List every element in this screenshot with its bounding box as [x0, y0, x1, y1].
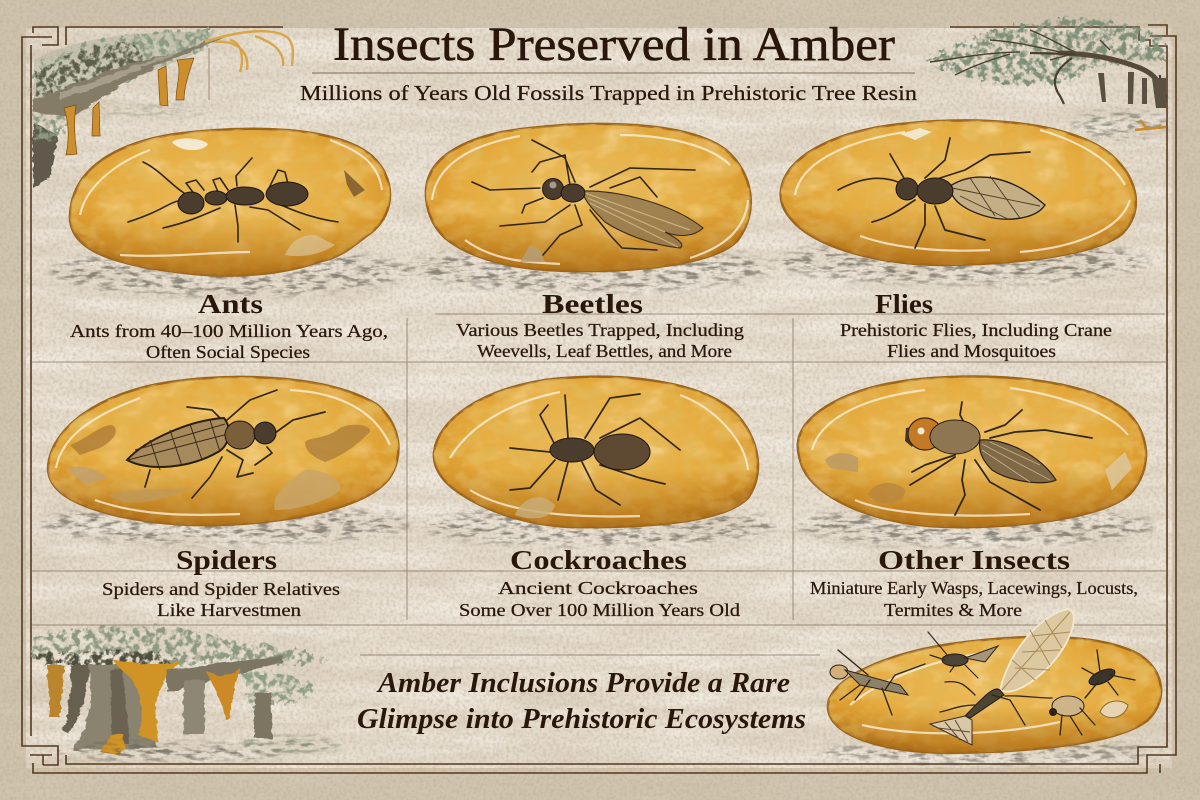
description: beetles: Weevells, Leaf Bettles, and More: [477, 341, 732, 361]
heading: other insects: Other Insects: [878, 545, 1070, 575]
icon: ant: [128, 158, 338, 242]
description: cockroaches: Ancient Cockroaches: [498, 578, 698, 598]
panel: beetles: [408, 124, 772, 361]
icon: cockroach spider: [510, 394, 680, 505]
ground shadow: [772, 240, 1148, 284]
panel: flies: [772, 120, 1148, 361]
icon: lacewing: [930, 609, 1074, 745]
ground shadow: [40, 504, 410, 544]
description: spiders: Like Harvestmen: [157, 600, 301, 620]
amber stone: [798, 377, 1146, 527]
description: cockroaches: Some Over 100 Million Years Old: [459, 600, 740, 620]
icon: winged beetle: [472, 140, 703, 255]
closing statement: Amber Inclusions Provide a Rare: [376, 668, 790, 699]
ground shadow: [820, 740, 1160, 764]
title: Insects Preserved in Amber: [333, 18, 895, 71]
icon: locust: [830, 650, 925, 715]
amber stone: [426, 124, 751, 271]
description: other insects: Miniature Early Wasps, Lacewings, Locusts,: [810, 578, 1138, 598]
amber stone: [828, 637, 1161, 753]
illustration: trees, top right: [925, 18, 1170, 139]
description: beetles: Various Beetles Trapped, Including: [456, 320, 744, 340]
ground shadow: [795, 506, 1155, 546]
subtitle: Millions of Years Old Fossils Trapped in Prehistoric Tree Resin: [300, 81, 918, 105]
description: ants: Often Social Species: [146, 342, 310, 362]
description: flies: Flies and Mosquitoes: [887, 341, 1056, 361]
illustration: fallen resin tree, top left: [33, 30, 293, 188]
ground shadow: [50, 248, 410, 296]
heading: spiders: Spiders: [176, 545, 277, 575]
icon: dark fly: [1082, 650, 1135, 698]
description: spiders: Spiders and Spider Relatives: [102, 579, 340, 599]
icon: small beetle: [1049, 696, 1095, 735]
panel: spiders: [40, 377, 410, 620]
panel: ants: [50, 129, 410, 362]
amber stone: [781, 120, 1136, 265]
description: other insects: Termites & More: [884, 600, 1022, 620]
heading: beetles: Beetles: [542, 289, 643, 319]
illustration: resin-dripping trees, bottom left: [32, 626, 340, 761]
amber stone: [48, 377, 398, 525]
closing statement: Glimpse into Prehistoric Ecosystems: [357, 704, 806, 735]
description: ants: Ants from 40–100 Million Years Ago,: [70, 321, 388, 341]
panel dividers: [32, 314, 1167, 655]
illustration: amber with assorted insects: [820, 609, 1161, 764]
closing statement: [357, 668, 806, 735]
amber stone: [70, 129, 390, 275]
amber stone: [434, 377, 758, 527]
ground shadow: [422, 506, 778, 546]
panel: other insects: [795, 377, 1155, 620]
icon: elongated beetle: [127, 390, 325, 498]
description: flies: Prehistoric Flies, Including Crane: [840, 320, 1112, 340]
icon: winged insect: [905, 402, 1092, 515]
icon: small wasp: [928, 632, 998, 678]
heading: ants: Ants: [198, 289, 263, 319]
icon: fly: [838, 138, 1045, 248]
heading: flies: Flies: [875, 289, 933, 319]
ground shadow: [408, 244, 772, 292]
panel: cockroaches: [422, 377, 778, 620]
heading: cockroaches: Cockroaches: [510, 545, 687, 575]
